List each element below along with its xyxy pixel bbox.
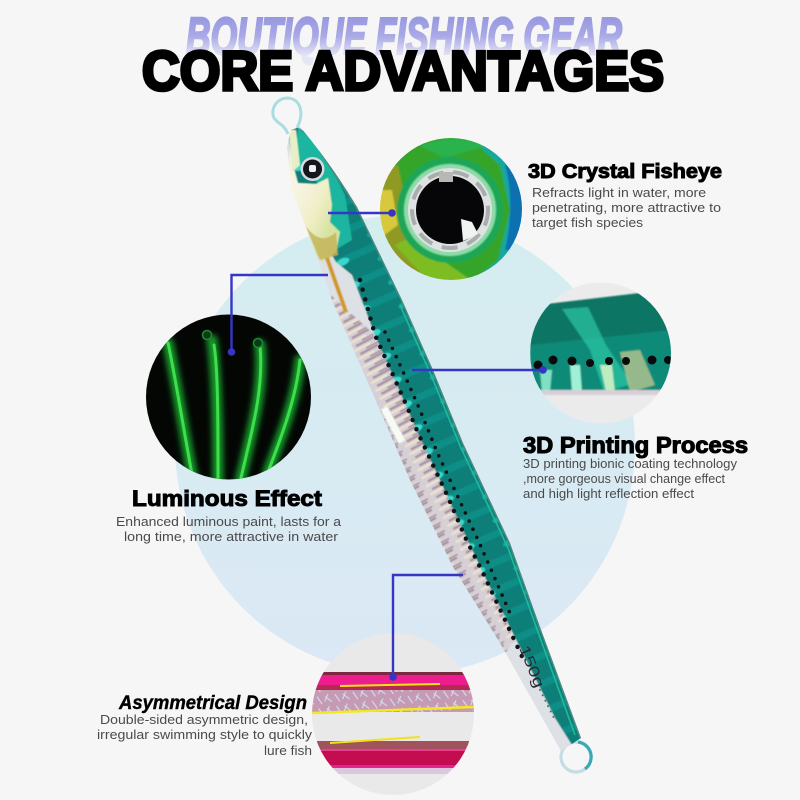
heading block: crystal fisheye [528, 161, 722, 230]
heading block: luminous effect [116, 486, 341, 544]
heading block: luminous effect: long time, more attractive in water [124, 530, 338, 544]
heading: Asymmetrical Design [118, 693, 307, 714]
connector: luminous [228, 275, 328, 356]
dot rows [360, 280, 526, 665]
heading block: 3D printing process [523, 432, 748, 501]
connector: fisheye [328, 209, 396, 217]
head teal [295, 128, 352, 250]
background circle [175, 215, 635, 675]
heading block: 3D printing process: ,more gorgeous visual change effect [523, 472, 726, 486]
eye surround colors [382, 164, 422, 274]
description: 3D printing bionic coating technology [523, 457, 738, 471]
heading: 3D Crystal Fisheye [528, 161, 722, 183]
panel: luminous image [146, 314, 312, 482]
heading block: 3D printing process: and high light reflection effect [523, 487, 695, 501]
top ring [273, 98, 301, 134]
right edge highlight [320, 150, 581, 738]
weight marking: 150g [515, 643, 548, 690]
heading: 3D Printing Process [523, 432, 748, 458]
eye pupil [416, 176, 484, 244]
title line: core advantages: CORE ADVANTAGES [142, 39, 664, 102]
heading block: crystal fisheye: target fish species [532, 216, 643, 230]
connector: asymmetrical [389, 575, 463, 681]
lure eye [300, 157, 324, 181]
heading block: asymmetrical design: lure fish [264, 744, 312, 758]
heading block: crystal fisheye: penetrating, more attractive to [532, 201, 721, 215]
description: Refracts light in water, more [532, 186, 706, 200]
lure body [287, 127, 581, 751]
tail ring [561, 742, 591, 772]
title [142, 8, 664, 102]
glowing strands [168, 340, 300, 482]
heading block: asymmetrical design [97, 693, 313, 758]
heading block: asymmetrical design: irregular swimming style to quickly [97, 728, 313, 742]
description: Double-sided asymmetric design, [100, 713, 308, 727]
fishing lure [270, 98, 600, 772]
printed stripes [562, 307, 632, 392]
panel: printing image [530, 282, 672, 424]
bright rim line [400, 305, 575, 735]
description: Enhanced luminous paint, lasts for a [116, 515, 341, 529]
eye silver ring [408, 168, 492, 252]
heading: Luminous Effect [132, 486, 323, 511]
connector: printing [412, 366, 547, 374]
head cream [289, 150, 340, 262]
panel: crystal fisheye image [378, 136, 525, 283]
black dots [534, 356, 672, 370]
panel: asymmetrical image [312, 632, 474, 796]
